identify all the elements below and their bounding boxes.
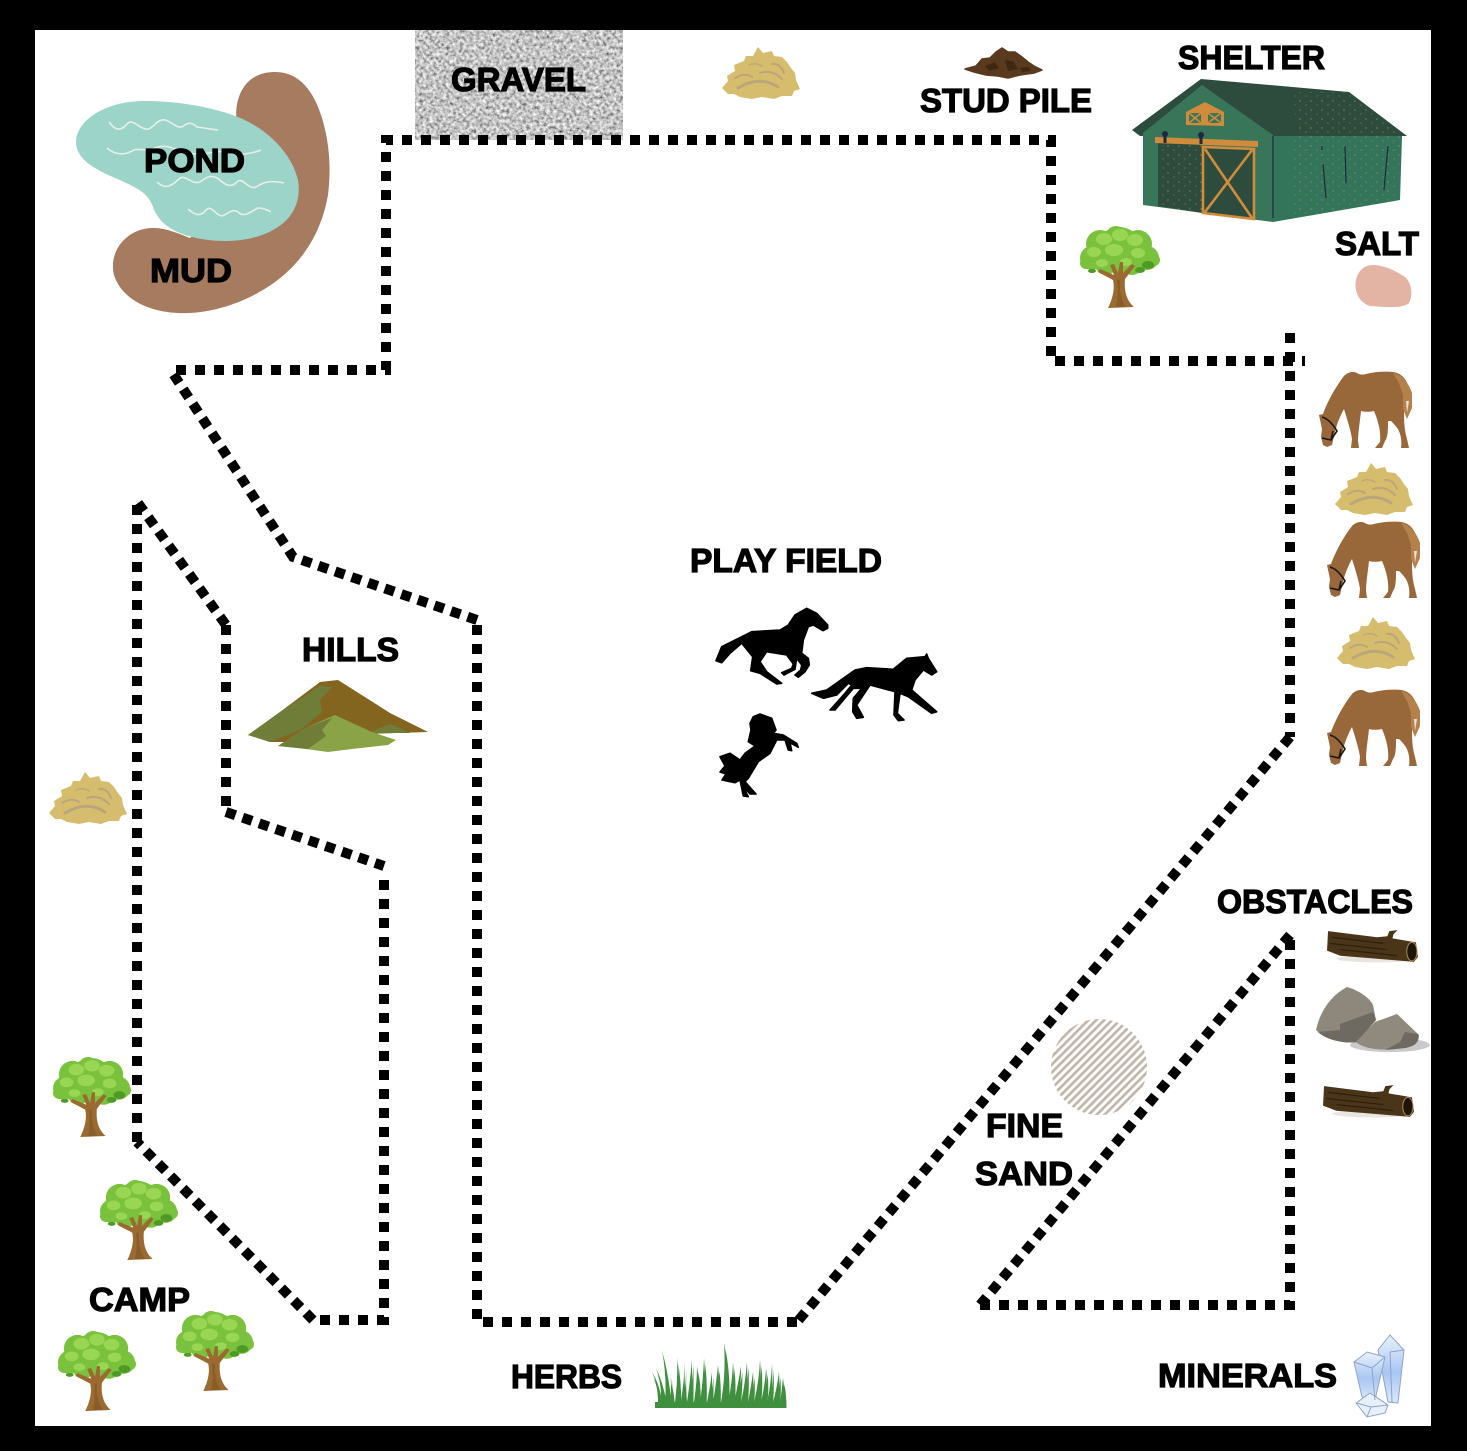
barn roof bbox=[1132, 79, 1407, 136]
label: fine: FINE bbox=[986, 1107, 1063, 1144]
label: mud: MUD bbox=[150, 252, 232, 289]
icon: salt lick bbox=[1356, 265, 1411, 307]
icon: rocks bbox=[1316, 987, 1430, 1052]
fence: hills track inner side bbox=[221, 625, 231, 812]
gravel patch bbox=[415, 30, 623, 140]
fence: hills track west side bbox=[132, 503, 142, 1142]
icon: grazing horse 3 bbox=[1327, 690, 1420, 766]
icon: tree camp 2 bbox=[176, 1311, 254, 1391]
label: pond: POND bbox=[144, 142, 245, 179]
icon: running horses bbox=[716, 608, 937, 797]
icon: stud pile bbox=[965, 48, 1042, 78]
barn front wall bbox=[1143, 85, 1273, 222]
horse silhouette: gallop bbox=[716, 608, 828, 684]
label: camp: CAMP bbox=[89, 1281, 190, 1318]
icon: log 1 bbox=[1327, 930, 1418, 962]
barn sliding door bbox=[1203, 147, 1254, 219]
label: stud pile: STUD PILE bbox=[920, 82, 1092, 119]
icon: tree west 1 bbox=[53, 1057, 131, 1137]
icon: herbs grass bbox=[652, 1343, 786, 1408]
icon: tree by shelter bbox=[1080, 226, 1160, 308]
barn rail bbox=[1155, 137, 1258, 147]
label: gravel: GRAVEL bbox=[451, 61, 586, 98]
label: sand: SAND bbox=[975, 1155, 1073, 1192]
icon: log 2 bbox=[1323, 1085, 1414, 1117]
label: minerals: MINERALS bbox=[1158, 1357, 1337, 1394]
horse silhouette: trot bbox=[812, 654, 937, 721]
icon: hay pile west bbox=[49, 772, 127, 824]
icon: mineral crystals bbox=[1354, 1335, 1404, 1417]
icon: shelter barn bbox=[1132, 79, 1407, 222]
icon: grazing horse 2 bbox=[1327, 522, 1420, 598]
pond bbox=[76, 101, 299, 241]
barn edge lines bbox=[1273, 136, 1388, 218]
fence: hills track lower diagonal bbox=[137, 1142, 313, 1320]
icon: tree camp 1 bbox=[58, 1331, 136, 1411]
label: shelter: SHELTER bbox=[1178, 39, 1325, 76]
icon: hills bbox=[248, 680, 428, 752]
fence: obstacles track diagonal bbox=[980, 935, 1290, 1305]
fence: play field north-west bbox=[172, 372, 477, 620]
barn gable window bbox=[1186, 102, 1224, 126]
water ripples bbox=[107, 120, 284, 216]
fence: play field north bbox=[176, 140, 1305, 370]
label: salt: SALT bbox=[1335, 225, 1419, 262]
fence: play field south and west bbox=[477, 620, 797, 1322]
icon: hay pile east 2 bbox=[1337, 617, 1415, 669]
label: herbs: HERBS bbox=[511, 1358, 622, 1395]
icon: tree west 2 bbox=[100, 1180, 178, 1260]
icon: hay pile east 1 bbox=[1335, 463, 1413, 515]
icon: hay pile top bbox=[722, 47, 800, 99]
label: hills: HILLS bbox=[302, 631, 399, 668]
mud area bbox=[113, 72, 330, 313]
barn door opening bbox=[1158, 143, 1202, 213]
label: obstacles: OBSTACLES bbox=[1217, 883, 1413, 920]
label: play field: PLAY FIELD bbox=[690, 542, 882, 579]
fence: hills track upper diagonal bbox=[138, 503, 226, 625]
fence: obstacles track bottom and side bbox=[980, 935, 1290, 1305]
fence: play field east bbox=[1285, 333, 1295, 737]
icon: grazing horse 1 bbox=[1319, 372, 1412, 448]
fence: hills track step bbox=[226, 812, 384, 866]
icon: fine sand circle bbox=[1051, 1019, 1147, 1115]
fence: hills track east side bbox=[313, 880, 384, 1320]
fence: play field south-east diagonal bbox=[797, 737, 1290, 1322]
horse silhouette: rearing bbox=[720, 714, 798, 797]
barn hangers bbox=[1162, 131, 1204, 144]
barn side wall bbox=[1273, 135, 1402, 222]
